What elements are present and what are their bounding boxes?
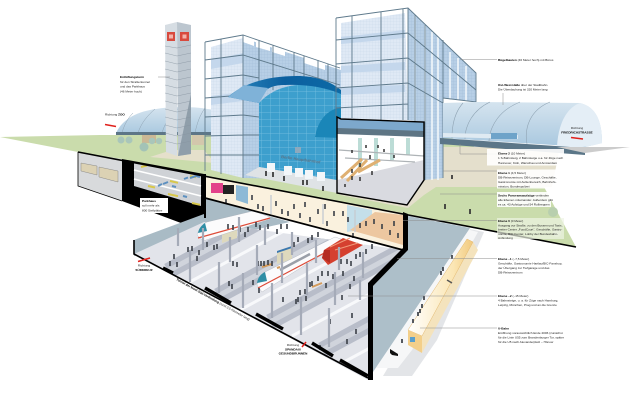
label: Richtung Südkreuz (135, 264, 153, 272)
label: Ebene 0: breiter Center „FoodCourt“, Geschäfte, Gastro- (498, 228, 562, 232)
people in cutaway (345, 145, 394, 187)
plaza: beige forecourt (340, 145, 560, 208)
label: Ebene -1: DB-Reisezentrum (498, 270, 523, 274)
label: Ebene 0 (497, 218, 564, 240)
parking label box: Parkhaus (142, 199, 156, 203)
arrow: to Zoo (105, 124, 116, 126)
label: Ebene -2: Leipzig, München, Prag und an die Grenze (498, 303, 557, 307)
inner arch (315, 107, 341, 138)
retaining wall (368, 212, 408, 380)
ICE train rear (197, 211, 270, 241)
label: Ebene 2: Hannover, Köln, Warschau und Amsterdam (498, 161, 558, 165)
shop front (236, 185, 248, 204)
icon: DB logo left (167, 32, 175, 41)
label: U-Bahn: für die U5 nach Alexanderplatz – Hönow (498, 340, 554, 344)
label: Richtung Spandau/Gesundbrunnen: GESUNDBRUNNEN (279, 352, 308, 356)
restaurant terrace (350, 212, 403, 245)
label: Ebene -1: Ebene –1 (–7,5 Meter) (498, 257, 529, 261)
trees and small buildings behind the tower (118, 135, 204, 152)
right station vault (440, 102, 630, 155)
parking label box (140, 198, 168, 213)
right office block (336, 8, 476, 180)
label: Ebene 2 (487, 149, 564, 166)
icon: DB logo right (180, 32, 189, 41)
left garage section (78, 152, 122, 201)
label: Entlüftungsturm: Entlüftungsturm (120, 75, 144, 79)
cutaway view into upper levels (337, 117, 424, 205)
label: Panoramaaufzüge: Sechs Panoramaaufzüge verbinden (498, 194, 549, 198)
label: U-Bahn: Eröffnung voraussichtlich Ende 2006 (zunächst (498, 331, 563, 335)
cars (141, 166, 200, 205)
label: Ebene -1: Geschäfte, Gastronomie Hartlau/BIC-Fanshop, (498, 262, 562, 266)
parking label box: 800 Stellplätze (142, 208, 163, 212)
roof canopy (228, 76, 341, 103)
label: Bügelbauten: Bügelbauten (46 Meter hoch) mit Büros (498, 58, 554, 62)
leader lines (158, 60, 503, 328)
arrow: to Spandau (302, 342, 306, 347)
black wall between parking and shopping level (204, 174, 206, 218)
label: Ebene 0: Ebene 0 (0 Meter) (498, 219, 523, 223)
label: Ebene -2: Ebene –2 (–15 Meter) (498, 294, 528, 298)
S-Bahn train in vault (443, 133, 518, 139)
label: Ebene 0: Ausgang zur Straße, zu den Bussen und Taxis, (498, 223, 563, 227)
label: tunnel: Tunnel der Nord-Süd-Verbindung (rund 3,5 Kilometer lang) (176, 277, 250, 321)
U-Bahn train (408, 239, 478, 353)
people on platforms (170, 222, 372, 350)
parking label box: soll mehr als (142, 204, 160, 208)
label: Ebene 2: Ebene 2 (10 Meter) (498, 152, 525, 156)
ventilation tower (165, 22, 191, 156)
label: Richtung Zoo: Richtung ZOO (105, 112, 125, 116)
label: Entlüftungsturm: (46 Meter hoch) (120, 89, 142, 93)
columns (178, 217, 363, 347)
label: Panoramaaufzüge: es ca. 43 Aufzüge und 54 Rolltreppen (498, 202, 550, 206)
label: U-Bahn: U-Bahn (498, 327, 509, 331)
label: Ebene 1 (497, 170, 557, 188)
label: Panoramaaufzüge: alle Ebenen miteinander. Außerdem gibt (498, 198, 553, 202)
ground line (78, 152, 576, 247)
label: Ebene 2: 1 S-Bahnsteig, 2 Bahnsteige u.a. für Züge nach (498, 156, 563, 160)
label: Ost-West-Halle: Ost-West-Halle über der Stadtbahn. (498, 83, 548, 87)
people in shopping level (226, 195, 398, 238)
label: Ebene -2: 4 Bahnsteige, u. a. für Züge nach Hamburg, (498, 299, 558, 303)
label: U-Bahn: für die Linie U55 zum Brandenburger Tor, später (498, 336, 564, 340)
back wall (134, 198, 290, 256)
label: Panoramaaufzüge (497, 192, 554, 207)
left station vault (116, 107, 213, 135)
glazed wall (347, 205, 372, 232)
label: Richtung Südkreuz: SÜDKREUZ (135, 268, 153, 272)
label: Entlüftungsturm: und das Parkhaus (120, 85, 145, 89)
label: Richtung Friedrichstraße: FRIEDRICHSTRASSE (561, 130, 593, 134)
label: Ebene 1: mission, Bundespolizei (498, 184, 530, 188)
arrow: to Friedrichstraße (571, 138, 583, 139)
main platform hall (133, 199, 400, 380)
ICE train front (257, 237, 344, 292)
label: Entlüftungsturm: für den Straßentunnel (120, 80, 150, 84)
label: Richtung Spandau/Gesundbrunnen: SPANDAU/ (285, 347, 301, 351)
atrium glass hall (228, 76, 341, 193)
label: Richtung Friedrichstraße: Richtung (571, 126, 583, 130)
tracks (164, 228, 400, 362)
platform and track bed (383, 229, 484, 376)
floor (134, 222, 403, 380)
shopping level (205, 177, 403, 250)
arrow: to Südkreuz (138, 258, 150, 262)
U-Bahn platform end (390, 349, 398, 356)
label: Ebene 1: Gastronomie mit Außenbereich, Bahnhofs- (498, 180, 556, 184)
escalators (341, 159, 380, 181)
label: Ost-West-Halle: Die Überdachung ist 320 Meter lang (498, 88, 548, 92)
parking garage (122, 159, 204, 226)
label: Richtung Spandau/Gesundbrunnen: Richtung (287, 343, 299, 347)
label: Ebene 0: nomie, BID Center, Lobby der Bundesbahn- (498, 232, 558, 236)
label: Ebene 1: Ebene 1 (4,5 Meter) (498, 171, 526, 175)
trees on right green (548, 207, 561, 237)
tunnel mouth edge (134, 240, 368, 378)
label: Richtung Südkreuz: Richtung (138, 264, 150, 268)
tower plaza (150, 150, 215, 163)
U-Bahn section (373, 216, 484, 376)
benches (262, 264, 322, 287)
people on ground level (266, 171, 470, 214)
label: Ebene -1: der Übergang zur Tiefgarage und das (498, 266, 550, 270)
label: Richtung Spandau/Gesundbrunnen (279, 343, 308, 356)
station sign: Berlin Hauptbahnhof (281, 154, 321, 165)
label: Ebene 0: Anbindung (498, 236, 513, 240)
label: Richtung Friedrichstraße (561, 126, 593, 134)
blue-grey tunnel wall (373, 216, 470, 372)
kiosks (222, 227, 292, 264)
ground surface (0, 135, 576, 247)
left office block (205, 35, 341, 180)
label: Ebene 1: DB-Reisezentrum, DB-Lounge, Geschäfte, (498, 176, 557, 180)
people on U-Bahn platform (402, 255, 452, 343)
red regional train (322, 238, 363, 265)
advertising wall (211, 183, 234, 194)
entrances (267, 163, 325, 181)
